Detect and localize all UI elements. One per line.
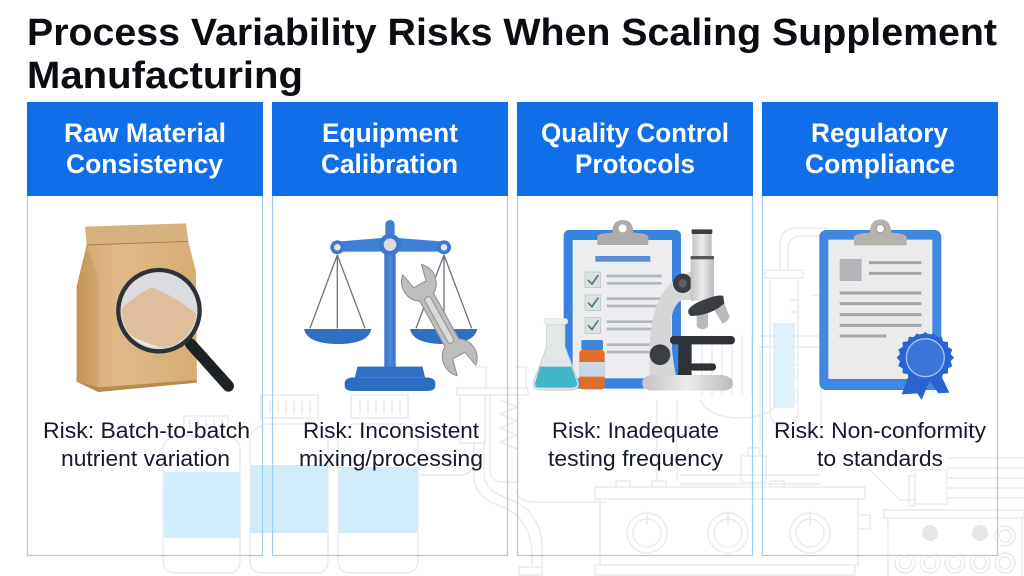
machine (595, 335, 870, 575)
risk text: Risk: Inconsistent (303, 418, 479, 443)
test tube and rack (760, 228, 832, 445)
risk text: Risk: Inadequate (552, 418, 719, 443)
icon: balance scale with wrench (304, 220, 482, 391)
icon: kraft bag with magnifying glass (77, 223, 228, 392)
smudged patch over machine (890, 530, 996, 556)
panel: equipment calibration (272, 102, 508, 556)
risk text (774, 418, 986, 471)
risk text (548, 418, 723, 471)
header: raw material consistency: Raw Material (64, 118, 226, 148)
title (27, 12, 997, 97)
risk text: testing frequency (548, 446, 723, 471)
icon: clipboard, flask, bottle and microscope (533, 220, 735, 391)
header: regulatory compliance (762, 102, 998, 196)
risk text: Risk: Non-conformity (774, 418, 986, 443)
risk text (299, 418, 483, 471)
panel: quality control protocols (517, 102, 753, 556)
header: equipment calibration: Calibration (321, 149, 458, 179)
bottle fills (164, 472, 240, 538)
risk text: nutrient variation (61, 446, 230, 471)
background: line-art lab equipment (163, 228, 1024, 576)
condenser (420, 367, 606, 575)
risk text: mixing/processing (299, 446, 483, 471)
header: regulatory compliance: Compliance (805, 149, 955, 179)
header: quality control protocols (517, 102, 753, 196)
header: regulatory compliance: Regulatory (811, 118, 948, 148)
panel: raw material consistency (27, 102, 263, 556)
header: equipment calibration (272, 102, 508, 196)
header: quality control protocols: Quality Control (541, 118, 729, 148)
risk text: to standards (817, 446, 943, 471)
header: raw material consistency (27, 102, 263, 196)
header: equipment calibration: Equipment (322, 118, 458, 148)
risk text (43, 418, 250, 471)
title: Process Variability Risks When Scaling Supplement (27, 12, 997, 54)
title: Manufacturing (27, 55, 303, 97)
icon: clipboard with certification seal (819, 219, 954, 400)
risk text: Risk: Batch-to-batch (43, 418, 250, 443)
header: quality control protocols: Protocols (575, 149, 695, 179)
panel: regulatory compliance (762, 102, 998, 556)
header: raw material consistency: Consistency (66, 149, 223, 179)
